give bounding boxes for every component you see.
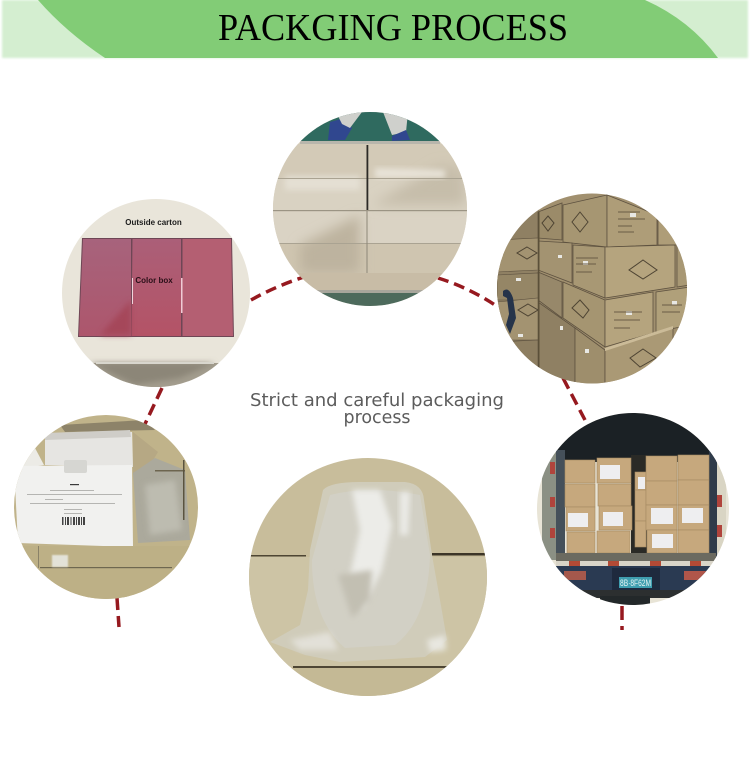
label: color box: Color box xyxy=(135,276,173,285)
photo: sealed cartons from above xyxy=(270,110,470,310)
license plate xyxy=(619,577,652,588)
dashed connector: carton to top photo xyxy=(251,277,304,300)
dashed connector: below truck xyxy=(620,606,624,630)
header banner xyxy=(2,0,748,58)
label: outside carton: Outside carton xyxy=(125,218,182,227)
photo: gift box and glass on carton xyxy=(12,415,200,601)
barcode xyxy=(62,517,85,525)
dashed connector: carton to left photo xyxy=(145,388,162,424)
license plate: 8B·8F62M xyxy=(620,578,651,588)
photo: truck loaded with cartons xyxy=(535,412,731,608)
dashed connector: top photo to stacked cartons xyxy=(438,278,498,307)
photo: stacked cartons on pallet xyxy=(495,192,690,387)
dashed connector: below left photo xyxy=(117,598,119,627)
center caption: process xyxy=(344,407,410,428)
dashed connector: stacked cartons to truck xyxy=(563,378,585,420)
title: PACKGING PROCESS xyxy=(218,7,568,49)
photo: color boxes in outside carton xyxy=(60,197,252,390)
center caption xyxy=(250,390,504,428)
photo: glass in plastic bag xyxy=(248,457,490,699)
center caption: Strict and careful packaging xyxy=(250,390,504,411)
